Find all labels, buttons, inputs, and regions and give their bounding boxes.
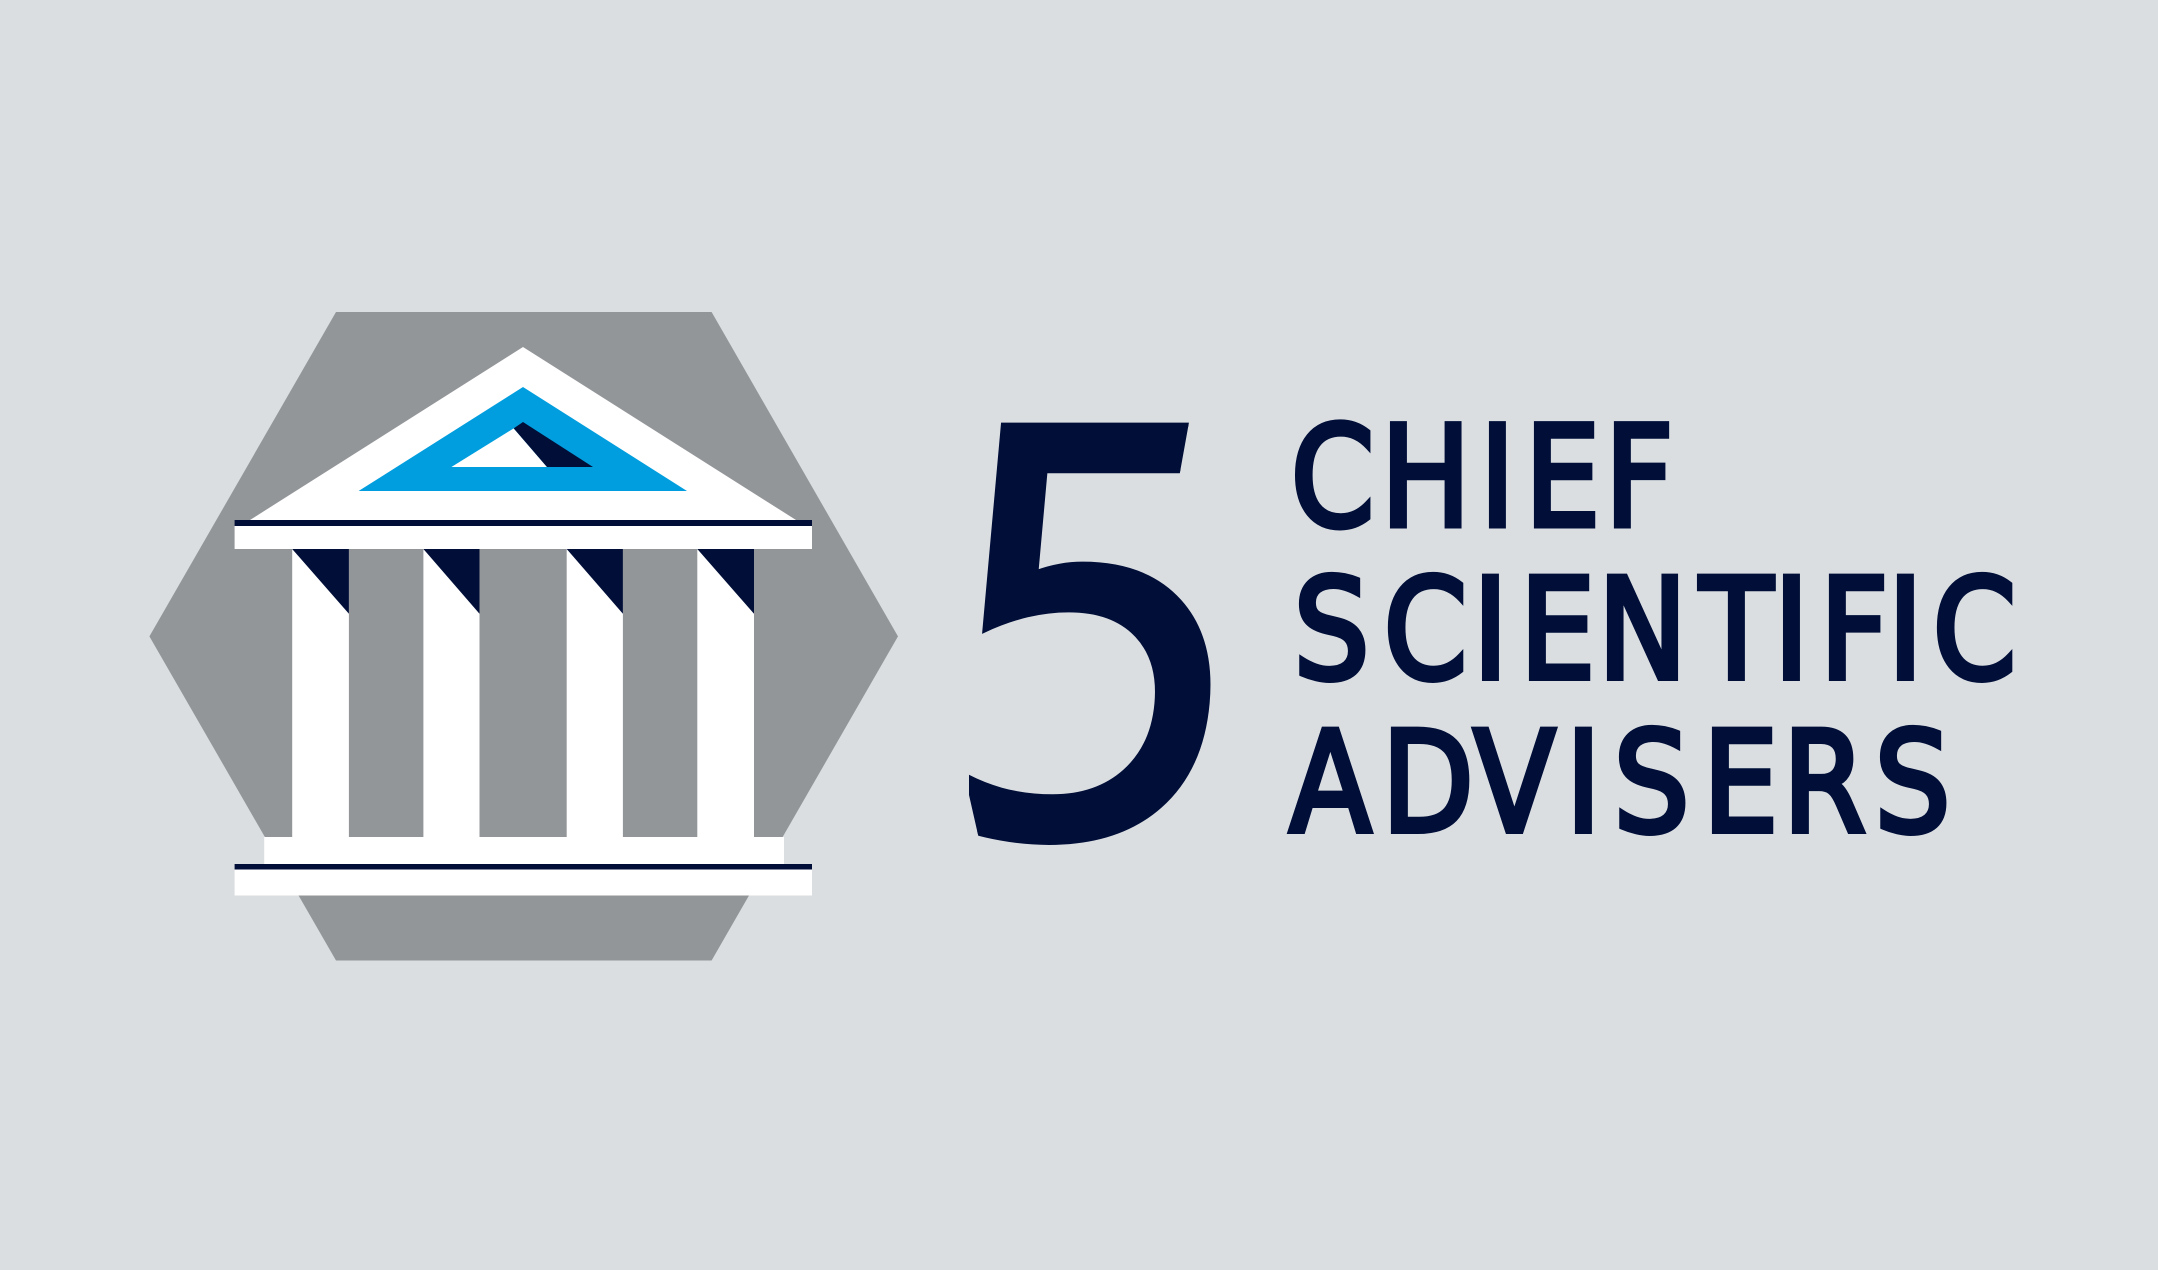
- pediment roof: [250, 347, 796, 520]
- hexagon backdrop: [149, 312, 898, 960]
- icon: government building on hexagon: [149, 312, 898, 960]
- big number 5: 5: [897, 313, 1288, 969]
- columns: [292, 549, 754, 837]
- infographic canvas: [150, 312, 2012, 960]
- line: SCIENTIFIC: SCIENTIFIC: [1294, 549, 2016, 711]
- line: ADVISERS: ADVISERS: [1289, 702, 1951, 864]
- line: CHIEF: CHIEF: [1291, 397, 1674, 559]
- label: chief scientific advisers: [1289, 397, 2016, 864]
- pediment blue triangle: [359, 387, 687, 491]
- base steps: [235, 837, 812, 896]
- top beam: [235, 520, 812, 549]
